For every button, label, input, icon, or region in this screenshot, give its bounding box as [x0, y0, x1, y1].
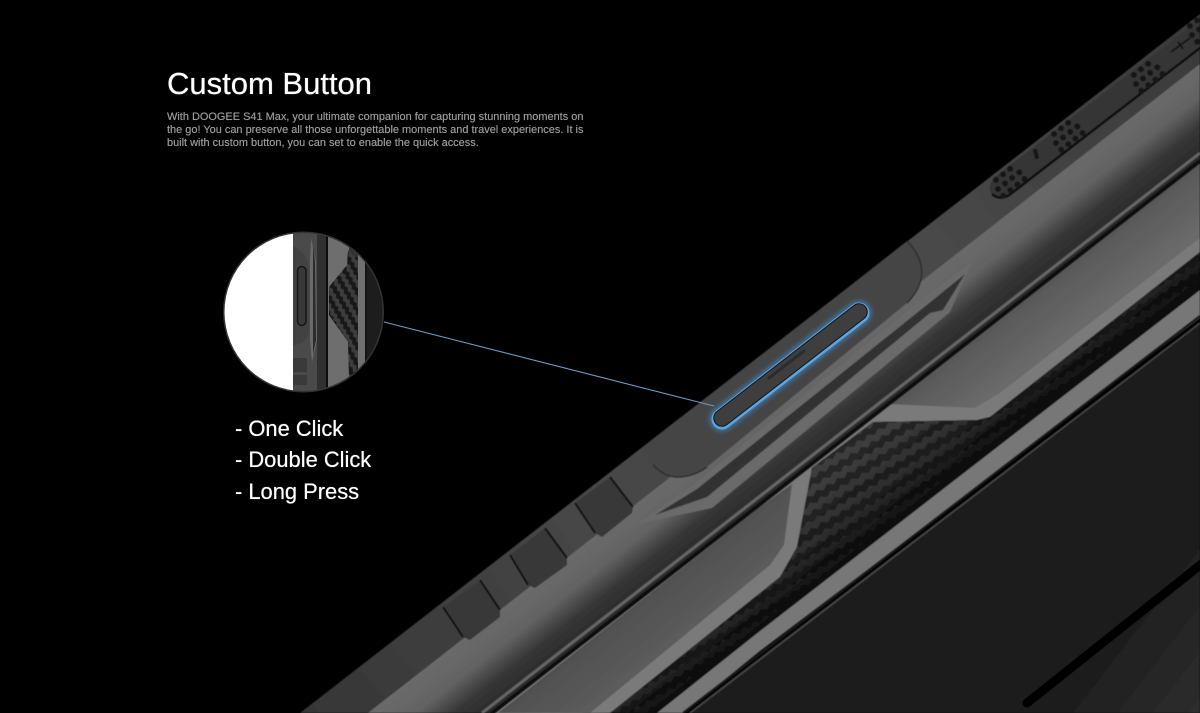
circle carbon	[329, 250, 358, 378]
description text: built with custom button, you can set to enable the quick access.	[167, 137, 479, 149]
circle side scoop	[296, 248, 308, 343]
groove highlight	[482, 153, 1200, 713]
description text: With DOOGEE S41 Max, your ultimate companion for capturing stunning moments on	[167, 111, 583, 123]
magnified circle	[220, 230, 386, 395]
screen	[688, 322, 1200, 713]
custom button highlighted	[722, 312, 859, 419]
strip shadow line	[683, 316, 1200, 713]
recessed scoop around button	[640, 241, 922, 477]
button actions list	[235, 416, 372, 504]
screen thin line	[690, 323, 1200, 713]
phone illustration	[223, 14, 1200, 713]
button actions list: - One Click	[235, 416, 343, 441]
volume slot	[1033, 149, 1039, 159]
carbon fibre band	[610, 252, 1200, 713]
phone side wall	[300, 14, 1200, 713]
light strip around the sliver	[636, 262, 972, 524]
callout line	[384, 322, 714, 406]
scoop lower contour	[653, 241, 922, 477]
side bump 1	[443, 580, 500, 640]
title: Custom Button	[167, 66, 372, 101]
inner right panel	[887, 163, 1200, 408]
dark sliver	[655, 274, 965, 515]
volume dots upper	[1127, 56, 1167, 95]
volume dots middle	[1047, 115, 1087, 154]
side bump 3	[575, 477, 633, 537]
phone front face	[368, 64, 1200, 713]
button actions list: - Double Click	[235, 447, 371, 472]
panel rim	[490, 161, 1200, 713]
circle sliver	[310, 238, 317, 362]
circle lower ribs	[293, 358, 307, 385]
button actions list: - Long Press	[235, 479, 359, 504]
lower bright strip	[657, 290, 1200, 713]
volume button strip	[989, 7, 1200, 200]
description text: the go! You can preserve all those unforgettable moments and travel experiences. It is	[167, 124, 583, 136]
inner left panel	[498, 484, 792, 713]
description text	[166, 111, 584, 149]
groove	[490, 161, 1200, 713]
plus minus mark	[1171, 38, 1190, 52]
side bump 2	[510, 528, 567, 588]
volume dots top	[1183, 7, 1200, 46]
button slot	[769, 351, 804, 378]
circle button pill	[298, 266, 306, 326]
volume dots lower	[989, 161, 1029, 200]
screen black slot	[1027, 562, 1200, 703]
